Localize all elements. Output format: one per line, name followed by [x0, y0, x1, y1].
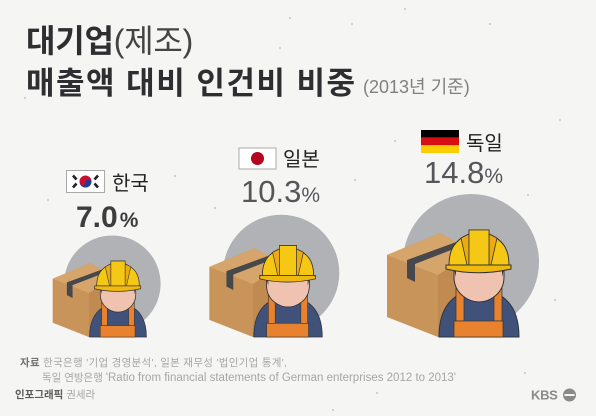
title: 매출액 대비 인건비 비중 [26, 66, 357, 101]
panel: Japan [209, 148, 339, 337]
panel: Germany [387, 130, 539, 337]
source note [20, 356, 456, 384]
source note: 독일 연방은행 'Ratio from financial statements of German enterprises 2012 to 2013' [42, 371, 456, 384]
panel: Korea [53, 170, 161, 337]
logo: KBS: KBS [531, 388, 558, 402]
title [26, 23, 470, 101]
label: Japan: 일본 [283, 148, 320, 171]
illustration: Japanese worker and box [209, 215, 339, 337]
icon: Japanese flag [239, 148, 276, 169]
title: (2013년 기준) [363, 77, 470, 97]
illustration: German worker and box [387, 194, 539, 337]
value: 7.0%: 7.0% [76, 201, 139, 234]
title: 대기업(제조) [26, 23, 193, 59]
label: Germany: 독일 [466, 132, 503, 155]
label: Korea: 한국 [112, 172, 149, 195]
source note: 자료 한국은행 '기업 경영분석', 일본 재무성 '법인기업 통계', [20, 356, 287, 369]
illustration: Korean worker and box [53, 235, 161, 337]
icon: German flag [421, 130, 459, 153]
credit: 인포그래픽 권세라 [15, 388, 96, 401]
value: 14.8%: 14.8% [424, 155, 503, 190]
logo: KBS [531, 388, 576, 402]
value: 10.3%: 10.3% [241, 174, 320, 209]
icon: Korean flag [66, 170, 104, 192]
